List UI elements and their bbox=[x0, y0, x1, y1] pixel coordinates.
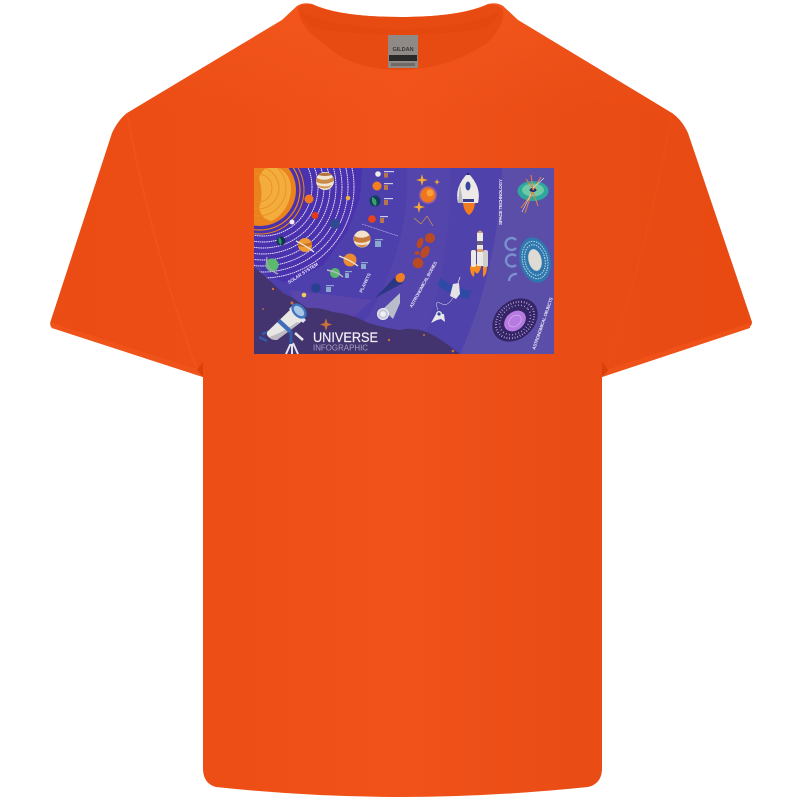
sleeve seams bbox=[127, 113, 197, 370]
spiral galaxy bbox=[519, 237, 551, 283]
collar inner bbox=[298, 4, 503, 70]
arc gauges bbox=[506, 238, 517, 281]
planet: earth bbox=[276, 236, 286, 246]
planet: venus bbox=[346, 196, 350, 200]
rocket 2 bbox=[470, 230, 488, 277]
poster: universe infographic bbox=[254, 168, 554, 354]
subtitle: INFOGRAPHIC bbox=[313, 342, 368, 352]
planets column bbox=[302, 171, 398, 297]
neck label: GILDAN bbox=[388, 35, 418, 68]
stars bbox=[413, 174, 440, 213]
elliptical galaxy bbox=[492, 298, 538, 342]
comet bbox=[378, 293, 400, 320]
rocket 1 bbox=[457, 172, 479, 215]
satellite bbox=[437, 277, 471, 299]
solar system orbits bbox=[254, 168, 354, 278]
planet: jupiter bbox=[316, 172, 334, 190]
planet: uranus bbox=[266, 257, 278, 274]
heading: space technology: SPACE TECHNOLOGY bbox=[498, 178, 503, 225]
sun bbox=[254, 168, 304, 234]
supernova bbox=[518, 175, 548, 213]
planet: moon bbox=[290, 220, 294, 224]
collar rib bbox=[300, 12, 500, 35]
background bands bbox=[427, 168, 502, 354]
star: orange giant bbox=[419, 186, 437, 204]
neck label: GILDAN: GILDAN bbox=[392, 47, 414, 53]
constellation bbox=[414, 216, 433, 226]
telescope bbox=[259, 300, 310, 354]
heading: planets: PLANETS bbox=[358, 272, 372, 293]
title: UNIVERSE bbox=[313, 330, 378, 345]
title bbox=[314, 332, 378, 350]
planet: mercury bbox=[304, 194, 314, 204]
planet: neptune bbox=[330, 219, 340, 229]
meteorite bbox=[398, 273, 405, 280]
heading: solar system: SOLAR SYSTEM bbox=[287, 261, 319, 285]
bottom dark landscape bbox=[254, 267, 460, 354]
planet: mars bbox=[312, 212, 318, 219]
heading: astronomical objects: ASTRONOMICAL OBJECTS bbox=[531, 297, 554, 350]
sparkles on dark landscape bbox=[262, 288, 454, 352]
planet: saturn bbox=[296, 238, 314, 252]
asteroids bbox=[413, 233, 435, 268]
heading: astronomical bodies: ASTRONOMICAL BODIES bbox=[409, 261, 438, 308]
astronaut bbox=[431, 298, 453, 323]
planet captions bbox=[380, 171, 394, 223]
meteor bbox=[375, 274, 404, 298]
